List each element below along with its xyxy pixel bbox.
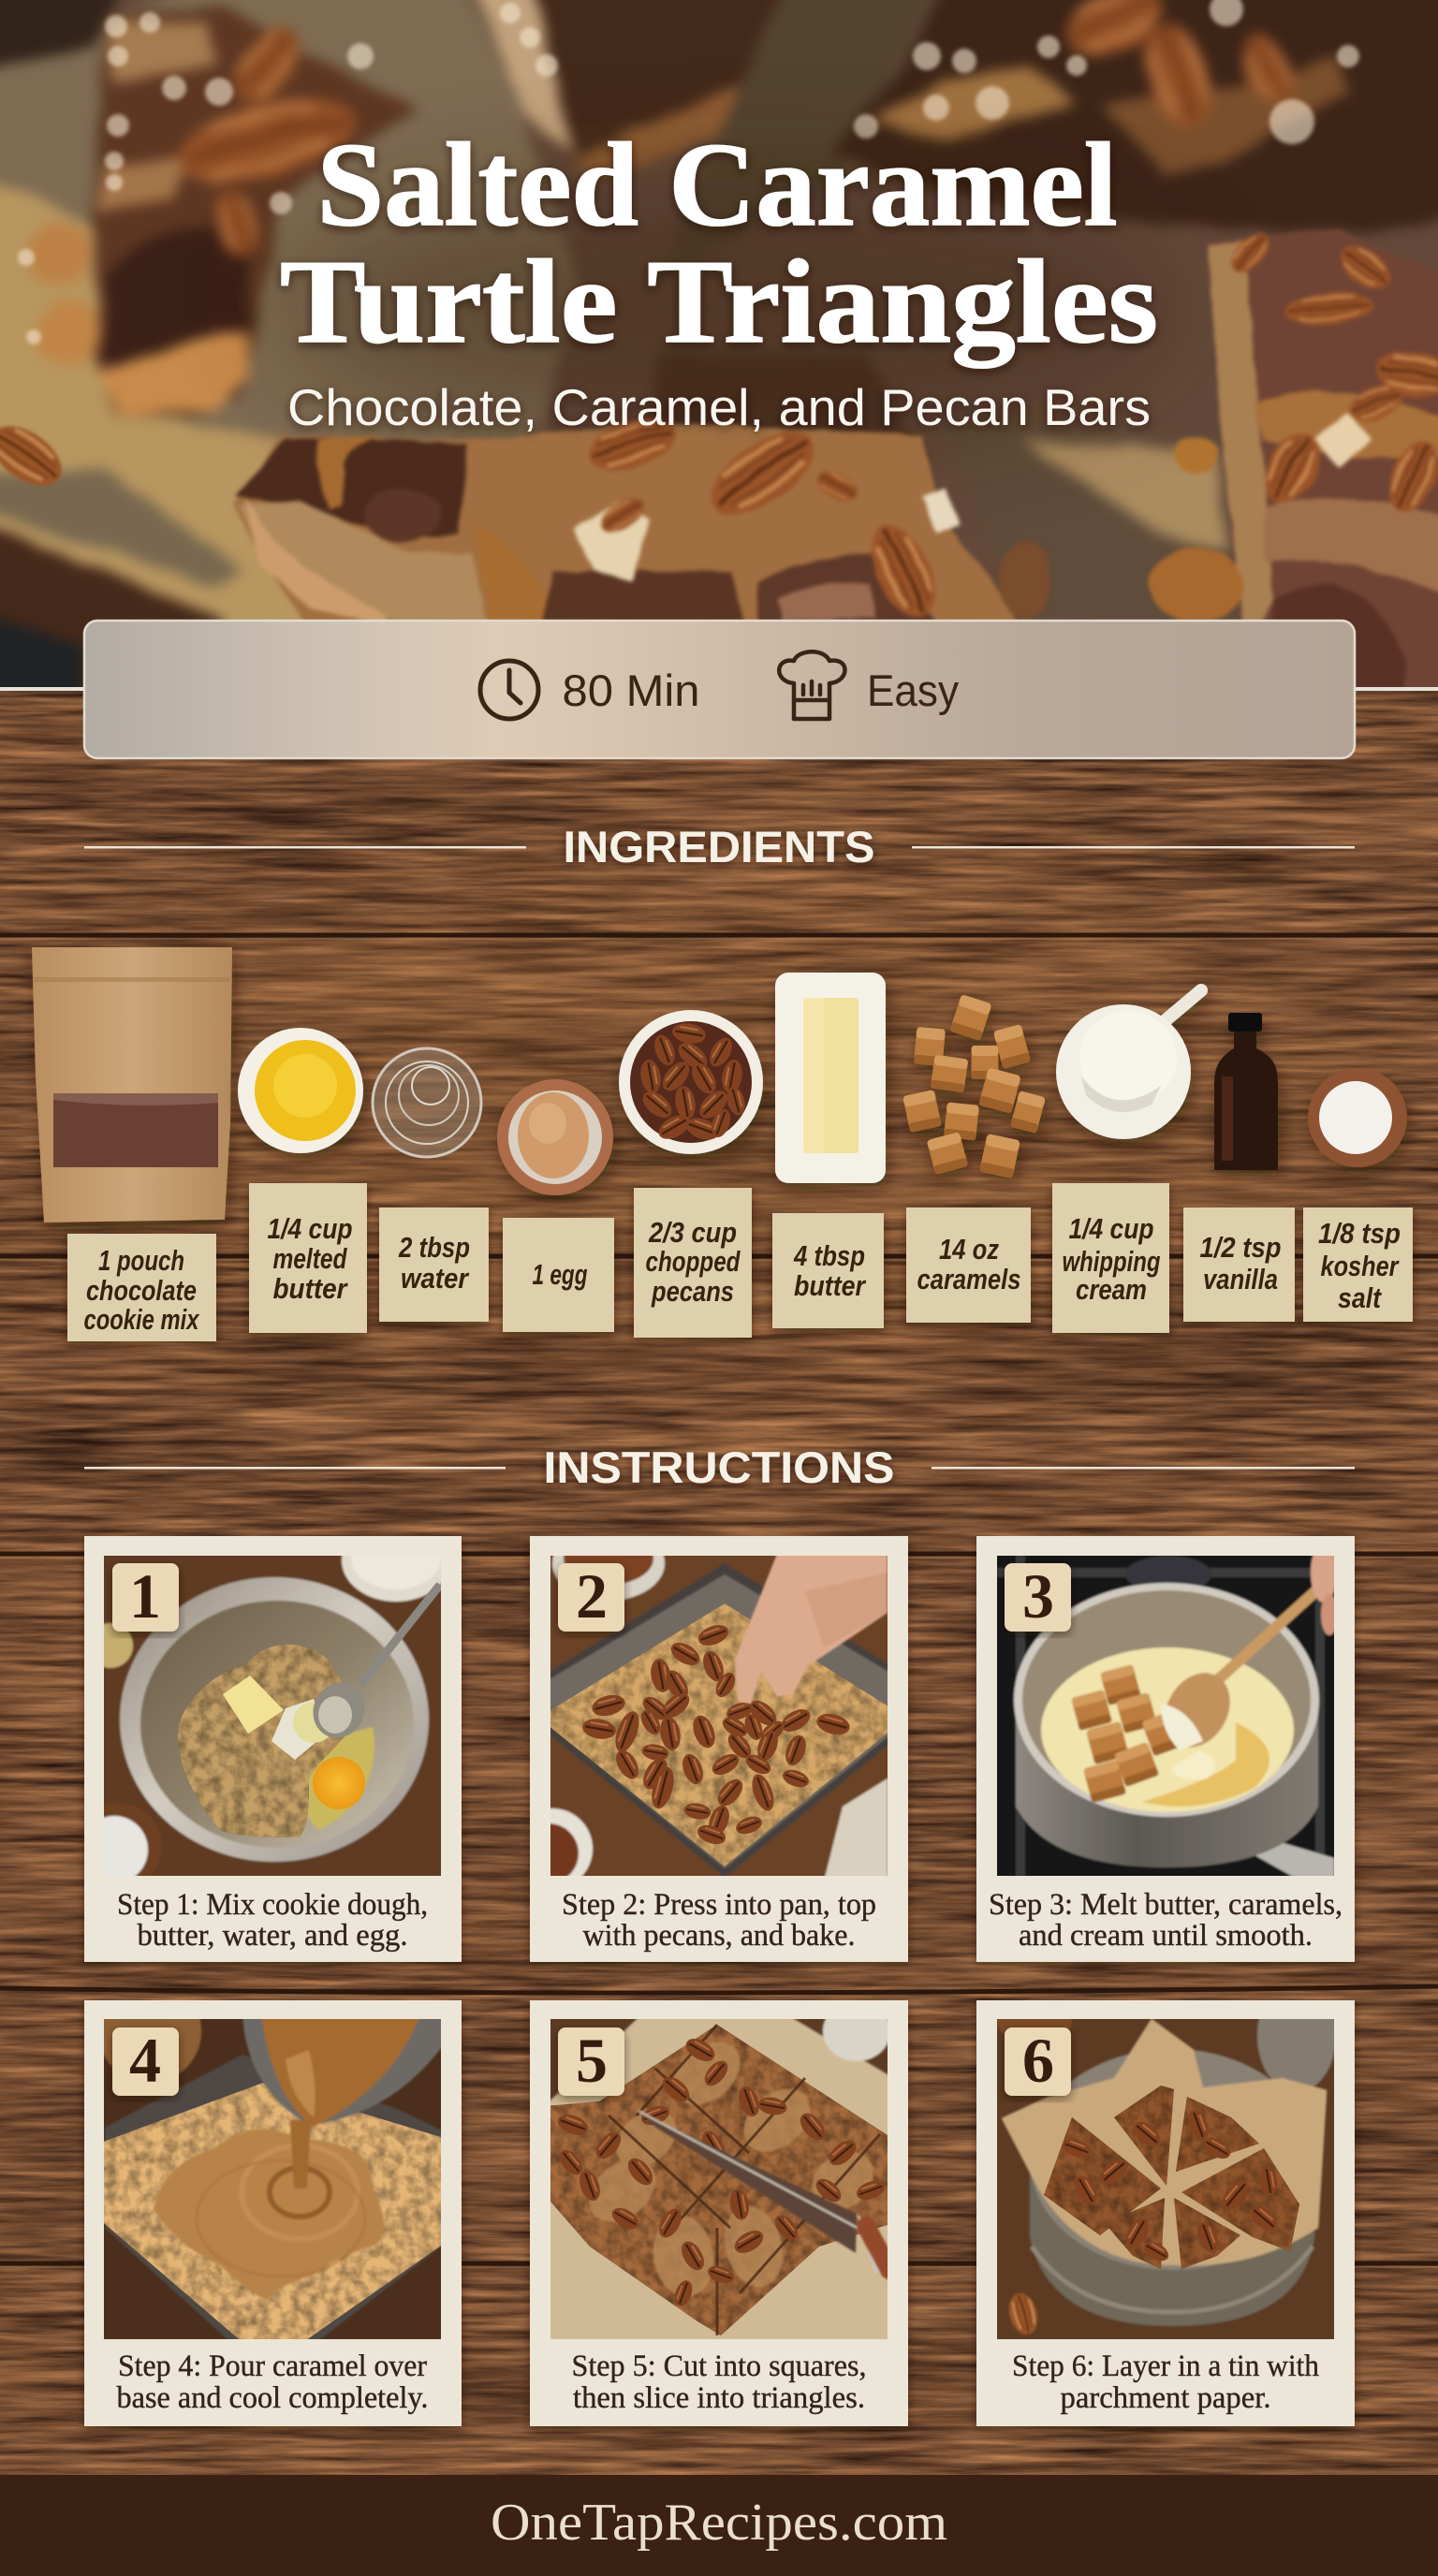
label: vanilla: vanilla [1203, 1263, 1278, 1295]
caption 5: then slice into triangles. [573, 2381, 865, 2415]
ingredient: cookie mix pouch [32, 947, 232, 1222]
label: water [379, 1208, 489, 1322]
caption 3: and cream until smooth. [1019, 1919, 1313, 1953]
caption 5 [571, 2349, 867, 2415]
pecan on parchment [0, 425, 63, 487]
badge 4 [112, 2025, 179, 2096]
info bar [84, 621, 1355, 758]
label: chopped pecans [634, 1188, 752, 1338]
photo: melting caramel [992, 1543, 1341, 1881]
ingredient: melted butter [238, 1028, 363, 1153]
ingredient labels [67, 1183, 1413, 1341]
caption 4: Step 4: Pour caramel over [118, 2349, 427, 2383]
badge 5 [558, 2025, 624, 2096]
bokeh highlights [18, 0, 1359, 344]
label: water: water [401, 1262, 470, 1295]
heading: instructions: INSTRUCTIONS [543, 1442, 895, 1492]
difficulty text: Easy [867, 666, 959, 715]
label: kosher salt: salt [1338, 1281, 1382, 1314]
subtitle: Chocolate, Caramel, and Pecan Bars [287, 378, 1151, 436]
label: melted butter: 1/4 cup [268, 1212, 352, 1245]
ingredient: kosher salt [1308, 1068, 1407, 1167]
label: chocolate cookie mix: cookie mix [84, 1303, 200, 1336]
footer text: OneTapRecipes.com [491, 2494, 947, 2552]
caption 2 [562, 1888, 876, 1953]
label: egg [503, 1218, 614, 1332]
label: whipping cream: 1/4 cup [1069, 1212, 1153, 1245]
ingredient: water [373, 1048, 481, 1157]
caption 2: Step 2: Press into pan, top [562, 1888, 876, 1922]
ingredient: whipping cream jug [1056, 990, 1201, 1139]
label: caramels: 14 oz [939, 1233, 999, 1266]
panel: step 3 [976, 1536, 1355, 1962]
title: Turtle Triangles [280, 235, 1158, 368]
caption 1: butter, water, and egg. [137, 1919, 408, 1953]
badge 6 [1005, 2025, 1071, 2096]
badge 3 [1005, 1560, 1071, 1632]
badge 3: 3 [1022, 1560, 1054, 1632]
panel: step 4 [84, 1980, 462, 2426]
label: kosher salt: 1/8 tsp [1318, 1217, 1401, 1250]
photo: tin with parchment [992, 1980, 1341, 2345]
caption 6: parchment paper. [1060, 2381, 1271, 2415]
label: vanilla: 1/2 tsp [1200, 1231, 1281, 1264]
caption 1: Step 1: Mix cookie dough, [117, 1888, 428, 1922]
label: chocolate cookie mix: chocolate [86, 1274, 197, 1307]
label: butter [772, 1213, 884, 1328]
caption 1 [117, 1888, 428, 1953]
caption 3 [989, 1888, 1343, 1953]
photo: pouring caramel [98, 1980, 449, 2349]
caption 6 [1012, 2349, 1319, 2415]
label: chopped pecans: 2/3 cup [648, 1216, 737, 1249]
label: vanilla [1183, 1208, 1295, 1322]
label: whipping cream [1052, 1183, 1169, 1333]
top right bar [829, 0, 1438, 234]
wood background [0, 683, 1438, 2490]
label: egg: 1 egg [532, 1258, 588, 1291]
main bar [232, 417, 1051, 620]
panel: step 5 [530, 2000, 908, 2426]
badge 2 [558, 1560, 624, 1632]
label: chopped pecans: chopped [646, 1245, 741, 1278]
badge 1: 1 [129, 1560, 161, 1632]
panel: step 2 [506, 1526, 946, 1962]
title: Salted Caramel [316, 118, 1118, 251]
ingredient: vanilla bottle [1214, 1013, 1278, 1170]
title [280, 118, 1158, 368]
label: butter: butter [794, 1269, 867, 1302]
centre shadow behind title [281, 178, 1180, 440]
top centre bar [463, 0, 786, 159]
footer band [0, 2475, 1438, 2576]
label: kosher salt: kosher [1320, 1250, 1400, 1282]
ingredient: butter dish [775, 973, 886, 1183]
time text: 80 Min [562, 666, 700, 715]
right bar [1150, 227, 1438, 711]
caption 4 [116, 2349, 429, 2415]
label: melted butter: melted [273, 1242, 347, 1275]
label: whipping cream: whipping [1062, 1245, 1161, 1278]
label: caramels [906, 1208, 1031, 1323]
label: water: 2 tbsp [398, 1231, 470, 1264]
badge 4: 4 [129, 2025, 161, 2096]
label: chocolate cookie mix: 1 pouch [98, 1244, 184, 1277]
divider line under hero [0, 687, 1438, 691]
panel: step 6 [976, 1980, 1355, 2426]
photo: pecans on dough [506, 1526, 946, 1889]
photo: slicing bars [545, 2001, 893, 2345]
label: whipping cream: cream [1076, 1273, 1147, 1306]
label: melted butter: butter [273, 1272, 348, 1305]
badge 1 [112, 1560, 179, 1632]
label: chocolate cookie mix [67, 1234, 216, 1341]
panel: step 1 [76, 1519, 462, 1962]
hero photo: caramel pecan bars [0, 0, 1438, 711]
label: melted butter [249, 1183, 367, 1333]
badge 6: 6 [1022, 2025, 1054, 2096]
parchment background and rear bars [0, 0, 1438, 711]
caption 6: Step 6: Layer in a tin with [1012, 2349, 1319, 2383]
caption 5: Step 5: Cut into squares, [571, 2349, 867, 2383]
icon: clock [480, 661, 538, 719]
caption 4: base and cool completely. [116, 2381, 429, 2415]
icon: chef hat [779, 651, 844, 719]
ingredient: chopped pecans [619, 1010, 763, 1154]
ingredient: egg [497, 1079, 613, 1195]
badge 5: 5 [576, 2025, 608, 2096]
label: chopped pecans: pecans [651, 1275, 734, 1308]
photo: mixing bowl [76, 1519, 450, 1889]
caption 3: Step 3: Melt butter, caramels, [989, 1888, 1343, 1922]
label: kosher salt [1303, 1208, 1413, 1322]
caption 2: with pecans, and bake. [582, 1919, 856, 1953]
label: butter: 4 tbsp [793, 1239, 865, 1272]
label: caramels: caramels [917, 1263, 1020, 1295]
ingredient: caramels [902, 994, 1046, 1178]
badge 2: 2 [576, 1560, 608, 1632]
left bar [94, 7, 417, 417]
heading: ingredients: INGREDIENTS [564, 822, 874, 871]
